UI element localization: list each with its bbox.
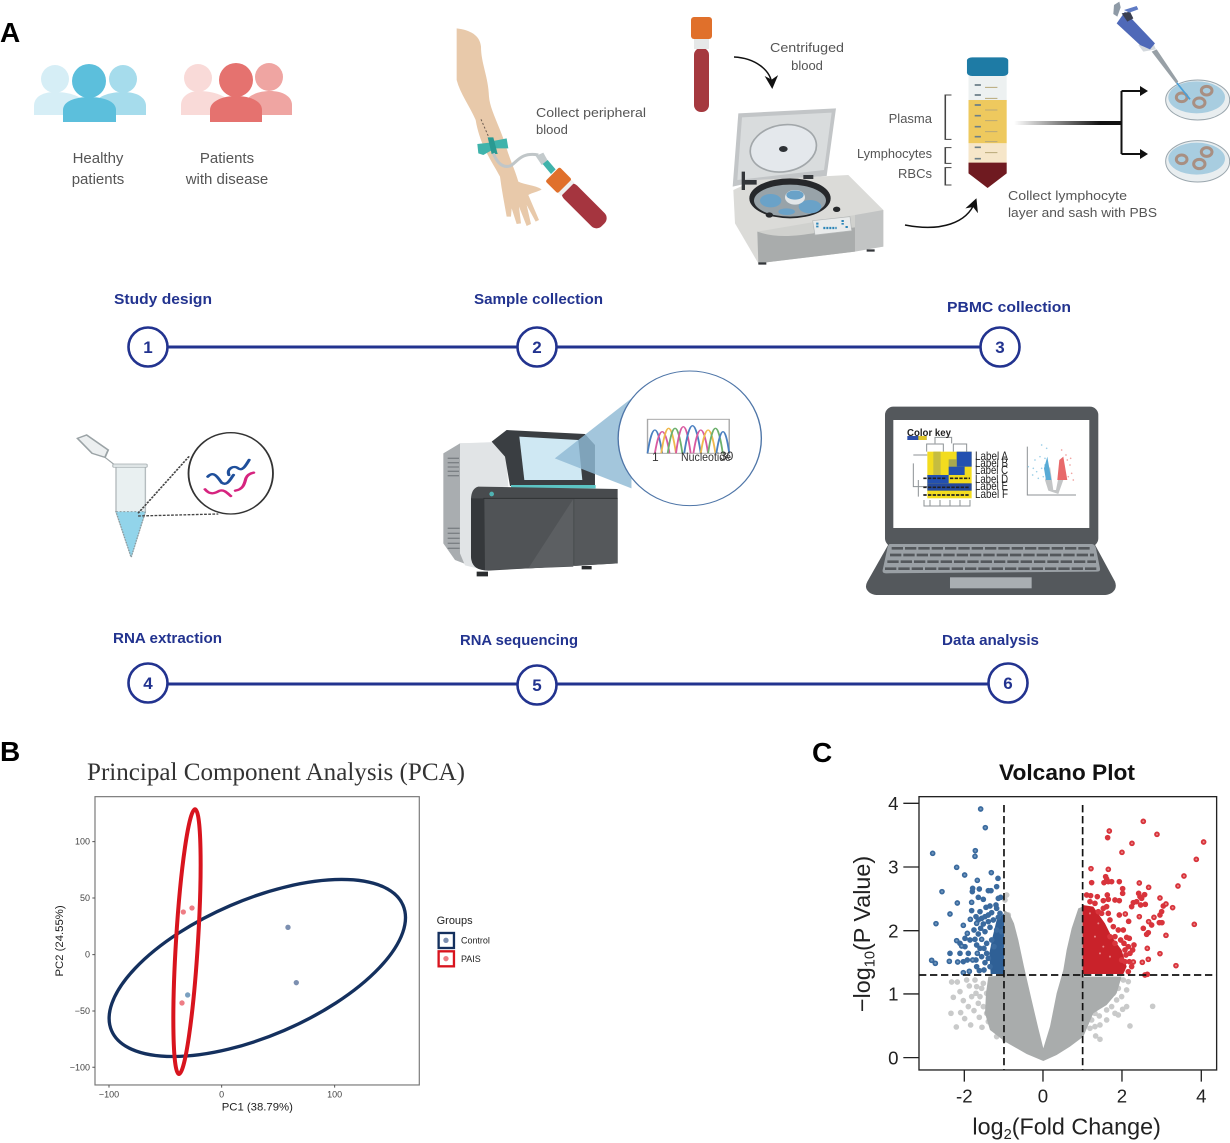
- icon: arm with tourniquet and blood tube: [457, 28, 610, 232]
- text: healthy patients: patients: [72, 171, 124, 188]
- chart: volcano plot: 10: [863, 951, 879, 967]
- text: patients with disease: Patients: [200, 150, 254, 167]
- chart: volcano plot: [849, 793, 1217, 1143]
- icon: RNA sequencer with chromatogram zoom: 1: [652, 450, 659, 464]
- legend: PCA groups: [437, 915, 490, 966]
- legend: PCA groups: Control: [461, 936, 490, 946]
- chart: PCA scatter: 50: [80, 893, 90, 903]
- icon: laptop with heatmap and mini volcano: Label C: [975, 463, 1008, 477]
- heading: study design: Study design: [114, 292, 212, 308]
- chart: PCA scatter: PC1 (38.79%): [222, 1102, 293, 1114]
- text: plasma / lymphocytes / RBCs labels: Plasma: [889, 111, 933, 126]
- text: centrifuged blood: blood: [791, 58, 823, 73]
- icon: pipette and petri dishes: [1113, 2, 1230, 182]
- icon: laptop with heatmap and mini volcano: [866, 407, 1116, 595]
- area: non-significant gray mass: [985, 907, 1122, 1061]
- text: collect lymphocyte layer: layer and sash with PBS: [1008, 205, 1157, 220]
- icon: healthy patients group: [34, 64, 146, 122]
- legend: PCA groups: Groups: [437, 915, 473, 927]
- chart: volcano plot: 2: [888, 920, 899, 941]
- timeline: steps 4 to 6: 4: [143, 674, 153, 693]
- timeline: steps 1 to 3: 3: [995, 338, 1005, 357]
- text: patients with disease: with disease: [185, 171, 268, 188]
- chart: volcano plot: 2: [1117, 1085, 1127, 1106]
- ellipse: control group: [85, 843, 430, 1093]
- arrow: branching to petri dishes: [1014, 86, 1148, 159]
- icon: RNA sequencer with chromatogram zoom: [443, 371, 761, 576]
- text: healthy patients: Healthy: [73, 150, 124, 167]
- icon: RNA sequencer with chromatogram zoom: Nucleotide: [681, 450, 731, 464]
- arrow: centrifuge to tube: [905, 202, 975, 227]
- chart: volcano plot: -2: [956, 1085, 973, 1106]
- icon: laptop with heatmap and mini volcano: Label E: [975, 479, 1008, 493]
- chart: PCA scatter: 0: [85, 950, 90, 960]
- chart: PCA scatter: 0: [219, 1090, 224, 1100]
- text: collect peripheral blood: Collect peripheral: [536, 105, 646, 120]
- icon: blood tube: [691, 17, 712, 112]
- icon: centrifuge: [733, 108, 883, 265]
- threshold lines: [919, 805, 1217, 1070]
- text: plasma / lymphocytes / RBCs labels: RBCs: [898, 166, 932, 181]
- timeline: steps 1 to 3: 1: [143, 338, 153, 357]
- icon: laptop with heatmap and mini volcano: Label B: [975, 456, 1008, 470]
- panel label B: B: [0, 736, 20, 767]
- icon: RNA sequencer with chromatogram zoom: 30: [720, 449, 734, 463]
- heading: RNA sequencing: RNA sequencing: [460, 633, 578, 649]
- timeline: steps 4 to 6: 5: [532, 676, 542, 695]
- icon: laptop with heatmap and mini volcano: Color key: [907, 428, 951, 439]
- text: plasma / lymphocytes / RBCs labels: Lymphocytes: [857, 146, 932, 161]
- chart: PCA scatter: [54, 797, 430, 1114]
- timeline: steps 1 to 3: [128, 328, 1020, 366]
- points: non-significant light gray: [951, 895, 1153, 1040]
- legend: PCA groups: PAIS: [461, 954, 481, 964]
- panel label A: A: [0, 17, 20, 48]
- heading: volcano plot title: Volcano Plot: [999, 760, 1136, 785]
- icon: patients with disease group: [181, 63, 292, 122]
- heading: PCA title: Principal Component Analysis (PCA): [87, 759, 465, 786]
- points: samples: [179, 905, 299, 1006]
- chart: volcano plot: 0: [888, 1047, 899, 1068]
- icon: RNA extraction microtube with zoom circle: [77, 433, 273, 557]
- points: up-regulated red: [1083, 821, 1204, 975]
- chart: volcano plot: 0: [1038, 1085, 1048, 1106]
- heading: RNA extraction: RNA extraction: [113, 631, 222, 647]
- chart: volcano plot: 1: [888, 984, 899, 1005]
- icon: conical tube with layers: [945, 57, 1008, 188]
- chart: PCA scatter: 100: [75, 837, 90, 847]
- timeline: steps 1 to 3: 2: [532, 338, 542, 357]
- chart: volcano plot: (Fold Change): [1012, 1113, 1161, 1139]
- arrow: to centrifuge: [734, 57, 772, 85]
- icon: laptop with heatmap and mini volcano: Label F: [975, 487, 1008, 501]
- heading: PBMC collection: PBMC collection: [947, 300, 1071, 316]
- heading: data analysis: Data analysis: [942, 633, 1039, 649]
- chart: volcano plot: 4: [888, 793, 899, 814]
- text: collect lymphocyte layer: Collect lymphocyte: [1008, 188, 1127, 203]
- text: centrifuged blood: Centrifuged: [770, 40, 844, 55]
- chart: volcano plot: 4: [1196, 1085, 1206, 1106]
- icon: laptop with heatmap and mini volcano: Label D: [975, 472, 1008, 486]
- panel label C: C: [812, 737, 832, 768]
- icon: laptop with heatmap and mini volcano: Label A: [975, 449, 1008, 463]
- chart: volcano plot: (P Value): [849, 856, 875, 951]
- chart: volcano plot: log: [972, 1113, 1004, 1139]
- chart: volcano plot: 3: [888, 857, 899, 878]
- points: down-regulated blue: [932, 809, 1004, 974]
- chart: volcano plot: −log: [849, 967, 875, 1012]
- heading: sample collection: Sample collection: [474, 292, 603, 308]
- timeline: steps 4 to 6: [128, 664, 1028, 704]
- chart: PCA scatter: −100: [99, 1090, 119, 1100]
- ellipse: PAIS group: [168, 809, 206, 1075]
- text: collect peripheral blood: blood: [536, 122, 568, 137]
- timeline: steps 4 to 6: 6: [1003, 674, 1013, 693]
- chart: PCA scatter: −100: [70, 1062, 90, 1072]
- chart: PCA scatter: 100: [327, 1090, 342, 1100]
- chart: PCA scatter: PC2 (24.55%): [54, 905, 66, 977]
- chart: volcano plot: 2: [1004, 1127, 1012, 1143]
- chart: PCA scatter: −50: [75, 1006, 90, 1016]
